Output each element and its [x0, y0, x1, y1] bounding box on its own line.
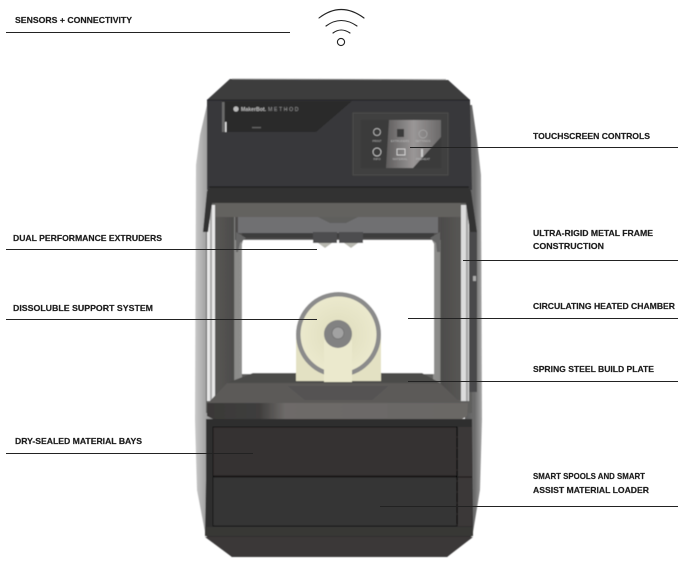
logo panel: METHOD: [268, 107, 300, 113]
label: dual performance extruders: DUAL PERFORMANCE EXTRUDERS: [13, 234, 163, 243]
touchscreen: PRINT: [372, 139, 382, 143]
label: sensors + connectivity: SENSORS + CONNECTIVITY: [15, 16, 133, 25]
label: ultra-rigid metal frame construction: CONSTRUCTION: [533, 242, 604, 251]
front band: [203, 187, 477, 232]
chamber interior: [242, 240, 434, 374]
build plate: [208, 373, 461, 403]
base rim: [205, 527, 473, 536]
touchscreen: [353, 113, 448, 175]
printer top housing: [207, 79, 472, 190]
label: dry-sealed material bays: DRY-SEALED MATERIAL BAYS: [15, 437, 143, 446]
label: smart spools and smart assist material loader: [380, 472, 678, 506]
touchscreen: INFO: [373, 157, 381, 161]
logo panel: MakerBot.: [241, 107, 267, 113]
label: smart spools and smart assist material loader: SMART SPOOLS AND SMART: [533, 472, 645, 481]
printer lid: [207, 79, 470, 100]
label: ultra-rigid metal frame construction: [463, 229, 678, 260]
lid edge: [207, 99, 470, 101]
printed spool part: [296, 292, 381, 382]
label: spring steel build plate: SPRING STEEL BUILD PLATE: [533, 365, 655, 374]
label: dissoluble support system: DISSOLUBLE SUPPORT SYSTEM: [13, 304, 153, 313]
dual extruders: [313, 232, 363, 248]
band top edge: [209, 186, 469, 188]
label: circulating heated chamber: CIRCULATING HEATED CHAMBER: [533, 302, 675, 311]
label: smart spools and smart assist material loader: ASSIST MATERIAL LOADER: [533, 486, 649, 495]
right side casing: [465, 105, 482, 532]
base: [205, 419, 473, 557]
material bay 2: [213, 477, 457, 526]
lid highlight: [232, 78, 446, 80]
corner brackets: [236, 232, 440, 252]
base foot: [205, 537, 473, 557]
touchscreen: SETTINGS: [415, 139, 431, 143]
material bay 1: [213, 427, 457, 476]
touchscreen: EXTRUDERS: [391, 139, 409, 143]
bay side panel: [457, 427, 472, 526]
label: touchscreen controls: TOUCHSCREEN CONTROLS: [533, 132, 651, 141]
front lip: [207, 403, 468, 419]
touchscreen: PREHEAT: [416, 157, 430, 161]
printer: [195, 79, 482, 557]
touchscreen: MATERIAL: [393, 157, 408, 161]
chamber frame: [206, 203, 477, 413]
logo panel: [222, 101, 352, 132]
left side casing: [195, 105, 215, 532]
icon: wifi: [319, 10, 364, 46]
label: ultra-rigid metal frame construction: ULTRA-RIGID METAL FRAME: [533, 229, 654, 238]
